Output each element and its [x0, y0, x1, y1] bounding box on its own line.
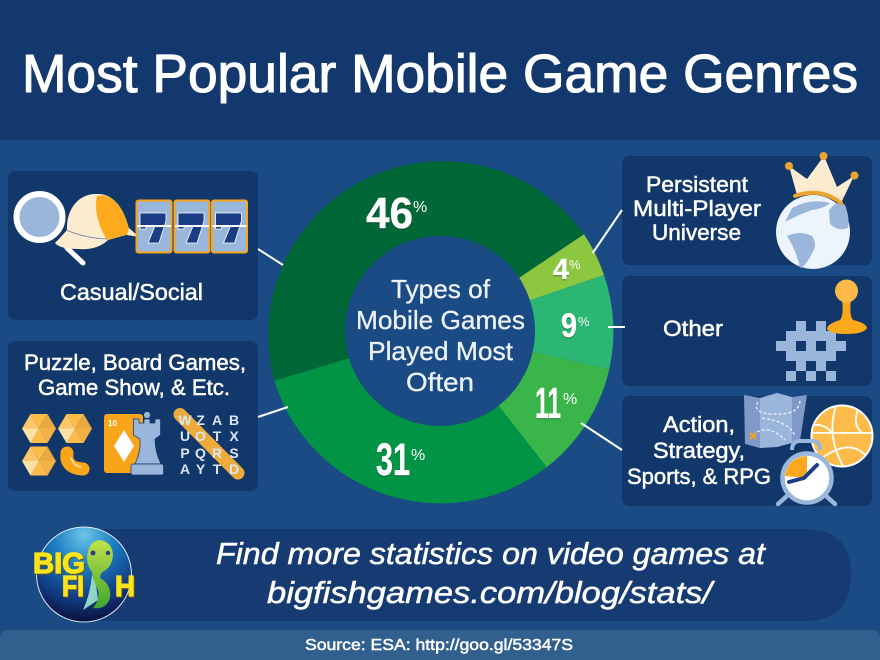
- icon: chess rook: [131, 412, 164, 475]
- icon: word search: P: [180, 445, 190, 461]
- segment 9%: [530, 275, 613, 369]
- value 11%: 11: [535, 379, 561, 428]
- logo: Big Fish: FI: [62, 571, 84, 603]
- banner text: Find more statistics on video games at: [216, 536, 766, 571]
- panel: action: [622, 393, 873, 506]
- label: Game Show, & Etc.: [38, 375, 230, 400]
- label: Multi-Player: [633, 196, 761, 221]
- icon: word search: R: [212, 445, 222, 461]
- title band: [0, 0, 880, 140]
- icon: detective hat: [55, 194, 139, 249]
- segment 11%: [498, 352, 609, 467]
- label: Other: [663, 316, 723, 341]
- icon: word search: S: [229, 445, 239, 461]
- banner text: bigfishgames.com/blog/stats/: [267, 575, 716, 610]
- label: [24, 350, 246, 400]
- icon: word search: Y: [196, 461, 206, 477]
- icon: word search: Z: [196, 412, 205, 428]
- logo: Big Fish: [33, 527, 135, 622]
- icon: word search: W: [178, 412, 192, 428]
- icon: pixel invader: [776, 321, 846, 381]
- label: Persistent: [646, 172, 748, 197]
- icon: magnifying glass: [16, 194, 83, 263]
- icon: alarm clock: [778, 441, 835, 504]
- donut chart: [268, 161, 613, 503]
- icon: word search: U: [180, 428, 190, 444]
- value 9%: 9: [561, 307, 577, 345]
- icon: word search: A: [180, 461, 190, 477]
- logo: Big Fish: BIG: [33, 548, 85, 580]
- title: Most Popular Mobile Game Genres: [22, 44, 858, 104]
- icon: slot machine 777: [136, 200, 247, 252]
- call to action banner: [100, 529, 851, 621]
- panel: casual/social: [8, 171, 258, 320]
- icon: word search: A: [212, 412, 222, 428]
- label: [633, 172, 761, 245]
- panel: persistent multi-player: [622, 152, 872, 269]
- source text: Source: ESA: http://goo.gl/53347S: [305, 637, 573, 654]
- banner text: [216, 536, 766, 610]
- label: [627, 412, 771, 489]
- source footer: [0, 630, 880, 660]
- icon: word search: X: [229, 428, 239, 444]
- segment 46%: [268, 161, 584, 381]
- icon: playing card: 10: [108, 419, 117, 428]
- value 11%: %: [563, 391, 577, 408]
- logo: Big Fish: H: [115, 571, 135, 603]
- center text: Often: [406, 367, 474, 397]
- icon: word search: [178, 412, 239, 477]
- label: Action,: [663, 412, 735, 437]
- connector lines: [258, 210, 625, 450]
- icon: word search: T: [213, 428, 222, 444]
- panel: puzzle: [8, 341, 258, 491]
- label: Strategy,: [653, 438, 745, 463]
- icon: word search: Q: [195, 445, 206, 461]
- icon: game pawn: [827, 280, 867, 334]
- icon: basketball: [811, 406, 873, 466]
- label: Universe: [652, 220, 741, 245]
- value 31%: 31: [376, 434, 410, 485]
- value 4%: 4: [553, 254, 569, 286]
- label: Casual/Social: [60, 279, 203, 305]
- value 4%: %: [569, 257, 581, 272]
- panel: other: [622, 276, 872, 386]
- icon: playing card: [104, 414, 143, 473]
- center text: [356, 274, 525, 397]
- center text: Mobile Games: [356, 305, 525, 335]
- segment 4%: [519, 234, 604, 300]
- center hole: [345, 236, 535, 426]
- value 4%: [553, 254, 581, 286]
- label: Sports, & RPG: [627, 464, 771, 489]
- icon: treasure map: [744, 393, 807, 448]
- icon: word search: T: [213, 461, 222, 477]
- label: Puzzle, Board Games,: [24, 350, 246, 375]
- value 9%: %: [578, 314, 590, 329]
- segment 31%: [274, 358, 547, 503]
- icon: globe: [776, 195, 850, 269]
- icon: crown: [785, 152, 858, 203]
- value 46%: 46: [366, 189, 413, 238]
- center text: Played Most: [368, 336, 514, 366]
- value 46%: %: [413, 199, 427, 216]
- center text: Types of: [391, 274, 491, 304]
- icon: word search: D: [229, 461, 239, 477]
- value 31%: %: [411, 447, 425, 464]
- value 9%: [561, 307, 590, 345]
- icon: word search: O: [195, 428, 206, 444]
- icon: word search: B: [229, 412, 239, 428]
- icon: candy gems: [22, 414, 92, 476]
